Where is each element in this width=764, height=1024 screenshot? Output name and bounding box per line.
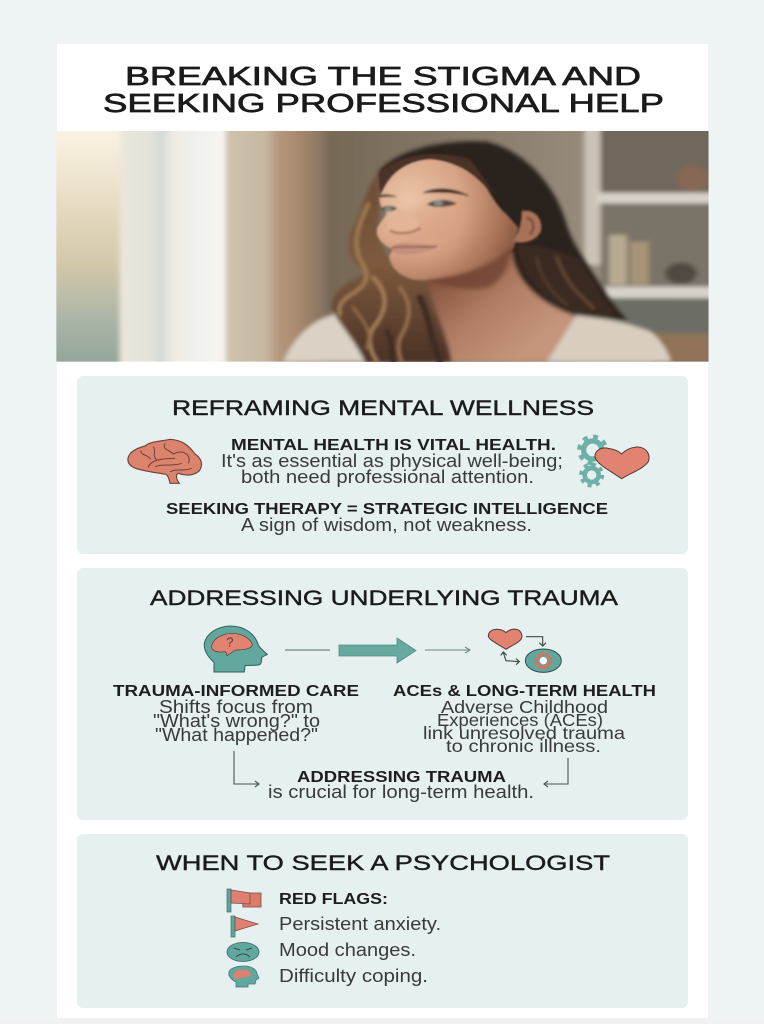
icon: gears and heart bbox=[579, 437, 649, 486]
arrow: right connector bbox=[544, 758, 568, 787]
ear bbox=[513, 211, 541, 243]
text: red flags: RED FLAGS: bbox=[279, 891, 388, 908]
column: trauma-informed care: TRAUMA-INFORMED CARE bbox=[113, 683, 359, 700]
panel: addressing underlying trauma bbox=[77, 568, 688, 820]
text: persistent anxiety: Persistent anxiety. bbox=[279, 914, 441, 934]
title: SEEKING PROFESSIONAL HELP bbox=[103, 88, 664, 118]
icon: heart and body cycle bbox=[488, 629, 561, 672]
text: mental health is vital health: MENTAL HEALTH IS VITAL HEALTH. bbox=[231, 437, 556, 454]
icon: red flags bbox=[227, 889, 261, 912]
heading: addressing underlying trauma: ADDRESSING UNDERLYING TRAUMA bbox=[150, 587, 618, 610]
column: trauma-informed care: "What's wrong?" to bbox=[153, 711, 320, 731]
photo portrait bbox=[283, 141, 672, 362]
heading: reframing mental wellness: REFRAMING MENTAL WELLNESS bbox=[172, 397, 594, 420]
column: aces and long-term health: to chronic illness. bbox=[446, 736, 601, 756]
eyebrows bbox=[423, 189, 469, 196]
face bbox=[377, 158, 518, 280]
text: mental health is vital health bbox=[221, 437, 563, 487]
text: mental health is vital health: It's as essential as physical well-being; bbox=[221, 451, 563, 471]
panel: reframing mental wellness bbox=[77, 376, 688, 554]
column: aces and long-term health: ACEs & LONG-TERM HEALTH bbox=[393, 683, 656, 700]
column: aces and long-term health: Experiences (ACEs) bbox=[437, 710, 603, 730]
line: connector before arrow bbox=[285, 649, 330, 651]
column: aces and long-term health: Adverse Childhood bbox=[441, 697, 608, 717]
text: addressing trauma bbox=[268, 769, 534, 802]
text: addressing trauma: is crucial for long-term health. bbox=[268, 782, 534, 802]
dark back hair bbox=[377, 141, 628, 321]
bottom strip bbox=[0, 1019, 764, 1024]
photo: woman looking out of a window bbox=[50, 125, 728, 372]
icon: head with question mark: ? bbox=[226, 636, 233, 650]
title: BREAKING THE STIGMA AND bbox=[125, 61, 641, 91]
eyes bbox=[427, 200, 457, 207]
shirt bbox=[283, 311, 370, 362]
icon: pennant flag bbox=[231, 916, 258, 937]
text: difficulty coping: Difficulty coping. bbox=[279, 966, 428, 986]
arrow: large teal bbox=[339, 638, 416, 663]
jaw shadow bbox=[427, 246, 512, 289]
text: seeking therapy: SEEKING THERAPY = STRATEGIC INTELLIGENCE bbox=[166, 501, 608, 518]
column: trauma-informed care: "What happened?" bbox=[155, 725, 318, 745]
icon: brain bbox=[128, 439, 201, 483]
icon: head with question mark bbox=[204, 626, 267, 672]
column: trauma-informed care bbox=[113, 683, 359, 745]
cheek glow bbox=[412, 206, 441, 236]
text: seeking therapy bbox=[166, 501, 608, 535]
arrow: left connector bbox=[234, 751, 259, 787]
lips bbox=[392, 243, 437, 255]
column: trauma-informed care: Shifts focus from bbox=[159, 697, 313, 717]
text: mood changes: Mood changes. bbox=[279, 940, 416, 960]
text: mental health is vital health: both need professional attention. bbox=[241, 467, 534, 487]
column: aces and long-term health bbox=[393, 683, 656, 756]
photo background: window, curtains, shelves bbox=[50, 125, 728, 372]
text: seeking therapy: A sign of wisdom, not weakness. bbox=[241, 515, 532, 535]
nose bbox=[404, 222, 419, 231]
left brown hair bbox=[332, 173, 452, 362]
neck and chest bbox=[425, 251, 575, 362]
text: addressing trauma: ADDRESSING TRAUMA bbox=[297, 769, 506, 786]
arrow: thin bbox=[425, 647, 470, 653]
icon: head with brain bbox=[229, 966, 259, 987]
column: aces and long-term health: link unresolved trauma bbox=[423, 723, 625, 743]
title bbox=[103, 61, 664, 118]
panel: when to seek a psychologist bbox=[77, 834, 688, 1008]
icon: sad face bbox=[227, 942, 259, 962]
hair over forehead bbox=[378, 154, 492, 196]
heading: when to seek a psychologist: WHEN TO SEEK A PSYCHOLOGIST bbox=[156, 852, 610, 875]
